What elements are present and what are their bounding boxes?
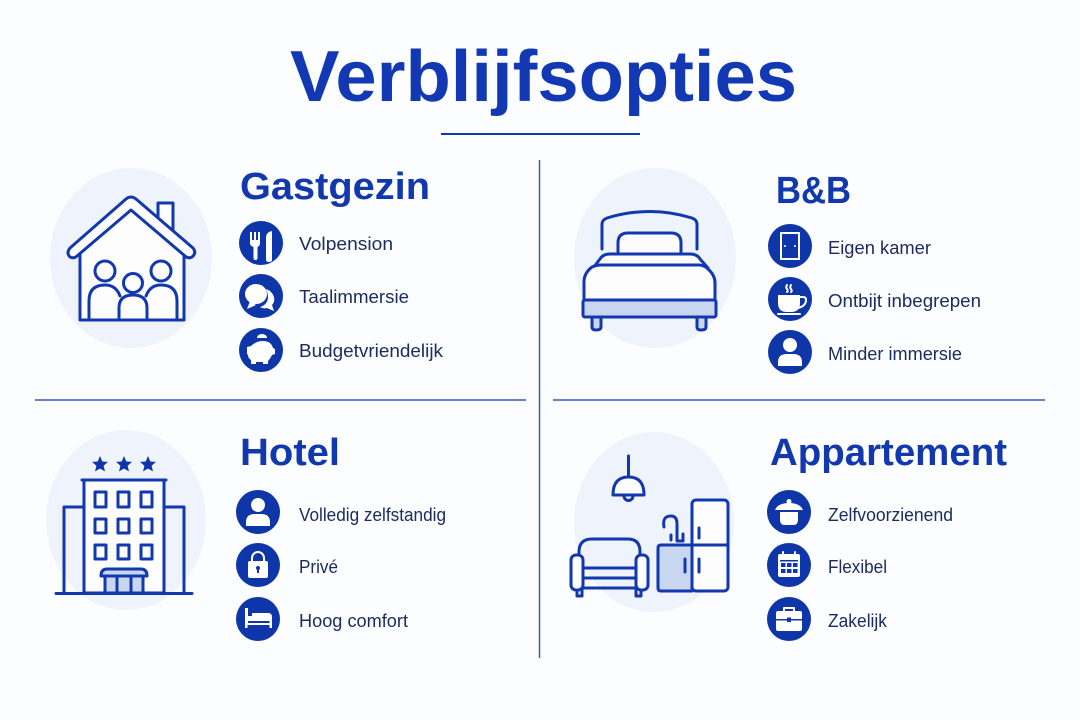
item: Hoog comfort [236, 597, 408, 641]
item: Volpension: Volpension [299, 234, 393, 254]
item: Hoog comfort: Hoog comfort [299, 611, 408, 631]
panel: Appartement [571, 432, 1007, 641]
item: Volledig zelfstandig: Volledig zelfstandig [299, 505, 446, 525]
item: Ontbijt inbegrepen [768, 277, 981, 321]
panel: B&B [574, 168, 981, 374]
item: Taalimmersie [239, 274, 409, 318]
illustration: living room and kitchen [571, 432, 734, 612]
item: Taalimmersie: Taalimmersie [299, 287, 409, 307]
item: Zakelijk [767, 597, 888, 641]
item: Zakelijk: Zakelijk [828, 611, 888, 631]
heading: Gastgezin [240, 166, 430, 208]
item: Minder immersie: Minder immersie [828, 344, 962, 364]
item: Ontbijt inbegrepen: Ontbijt inbegrepen [828, 291, 981, 311]
item: Eigen kamer: Eigen kamer [828, 238, 931, 258]
illustration: hotel building [46, 430, 206, 610]
item: Volledig zelfstandig [236, 490, 446, 534]
heading: Hotel [240, 432, 340, 474]
item: Volpension [239, 221, 393, 265]
item: Flexibel [767, 543, 887, 587]
item: Eigen kamer [768, 224, 931, 268]
item: Zelfvoorzienend [767, 490, 953, 534]
item: Zelfvoorzienend: Zelfvoorzienend [828, 505, 953, 525]
panel: Gastgezin [50, 166, 444, 372]
item: Budgetvriendelijk [239, 328, 444, 372]
item: Flexibel: Flexibel [828, 557, 887, 577]
illustration: bed [574, 168, 736, 348]
item: Minder immersie [768, 330, 962, 374]
item: Privé [236, 543, 338, 587]
item: Privé: Privé [299, 557, 338, 577]
panel: Hotel [46, 430, 446, 641]
heading: Appartement [770, 432, 1007, 474]
item: Budgetvriendelijk: Budgetvriendelijk [299, 341, 444, 361]
heading: B&B [776, 170, 851, 212]
illustration: house with family [50, 168, 212, 348]
title: Verblijfsopties [290, 37, 797, 117]
